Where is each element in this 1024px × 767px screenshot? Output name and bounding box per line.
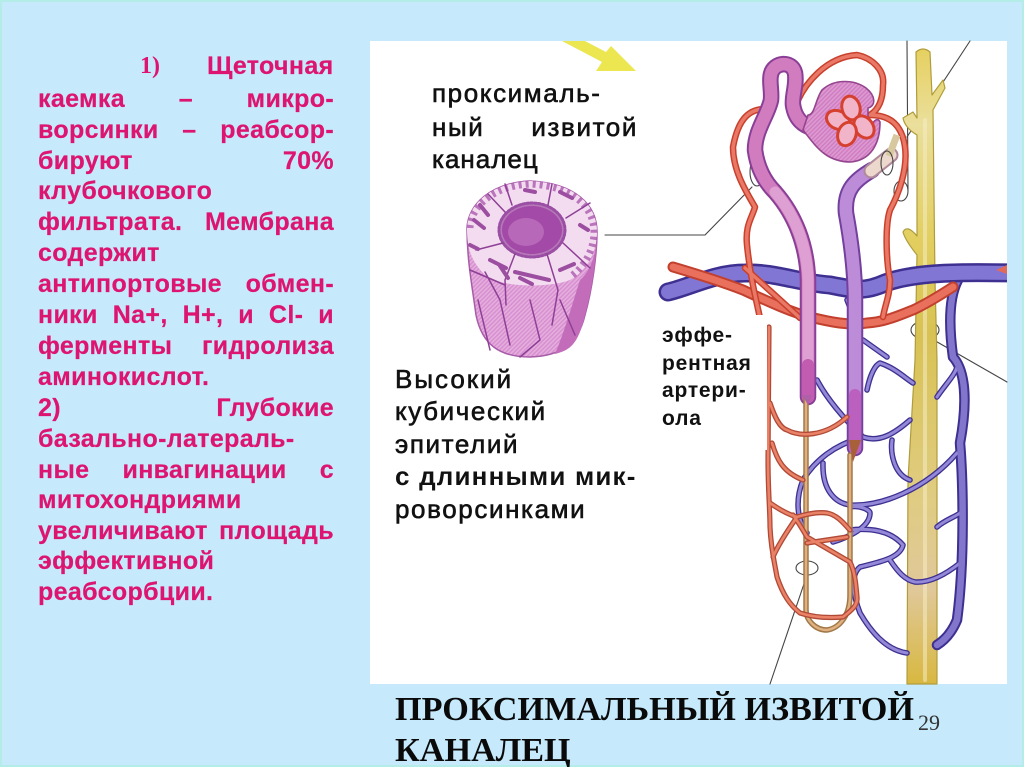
label: proximal tubule: ный извитой: [432, 112, 638, 142]
text block: left description: реабсорбции.: [38, 578, 213, 606]
arterioles red: [673, 55, 953, 324]
text block: left description: [38, 52, 334, 606]
label: high cuboidal epithelium: с длинными мик-: [395, 461, 637, 491]
renal corpuscle: [803, 82, 880, 162]
icon: cross-section of tubule: [467, 181, 597, 357]
leader lines and rings: [605, 41, 1007, 684]
text block: left description: бируют 70%: [38, 147, 334, 175]
text block: left description: клубочкового: [38, 177, 212, 205]
diagram: nephron: [466, 40, 1008, 685]
label: efferent arteriole: рентная: [662, 352, 752, 375]
mask: text box over diagram: [658, 315, 767, 450]
panel: white diagram area: [370, 41, 1007, 684]
text block: left description: ники Na+, H+, и Cl- и: [38, 301, 334, 329]
ring on tubule: [881, 151, 893, 175]
label: high cuboidal epithelium: роворсинками: [395, 494, 586, 524]
text block: left description: увеличивают площадь: [38, 517, 334, 545]
text block: left description: базально-латераль-: [38, 425, 295, 453]
horizontal vein: [668, 265, 1012, 292]
label: proximal tubule: [432, 78, 638, 174]
text block: left description: 2) Глубокие: [38, 394, 334, 422]
title: [395, 691, 914, 767]
page number: 29: [918, 710, 940, 735]
text block: left description: Щеточная: [207, 52, 334, 80]
text block: left description: ферменты гидролиза: [38, 332, 334, 360]
text block: left description: ные инвагинации с: [38, 456, 334, 484]
label: efferent arteriole: артери-: [662, 379, 747, 402]
text block: left description: 1): [140, 53, 160, 79]
title: ПРОКСИМАЛЬНЫЙ ИЗВИТОЙ: [395, 691, 914, 728]
text block: left description: содержит: [38, 239, 160, 267]
text block: left description: митохондриями: [38, 486, 242, 514]
label: high cuboidal epithelium: Высокий: [395, 364, 513, 394]
icon: yellow arrow: [562, 41, 636, 71]
label: proximal tubule: проксималь-: [432, 78, 602, 108]
veins blue: [798, 280, 964, 653]
label: efferent arteriole: ола: [662, 407, 702, 430]
text block: left description: каемка – микро-: [38, 85, 334, 113]
collecting duct yellow: [903, 49, 945, 684]
text block: left description: ворсинки – реабсор-: [38, 116, 334, 144]
label: high cuboidal epithelium: эпителий: [395, 429, 519, 459]
text block: left description: антипортовые обмен-: [38, 270, 334, 298]
label: efferent arteriole: эффе-: [662, 324, 733, 347]
label: proximal tubule: каналец: [432, 144, 539, 174]
nephron tubules: [755, 64, 897, 630]
capillaries red: [768, 327, 857, 618]
label: high cuboidal epithelium: [395, 364, 637, 524]
text block: left description: аминокислот.: [38, 363, 209, 391]
label: high cuboidal epithelium: кубический: [395, 396, 547, 426]
text block: left description: эффективной: [38, 547, 214, 575]
text block: left description: фильтрата. Мембрана: [38, 208, 334, 236]
label: efferent arteriole: [662, 324, 752, 430]
